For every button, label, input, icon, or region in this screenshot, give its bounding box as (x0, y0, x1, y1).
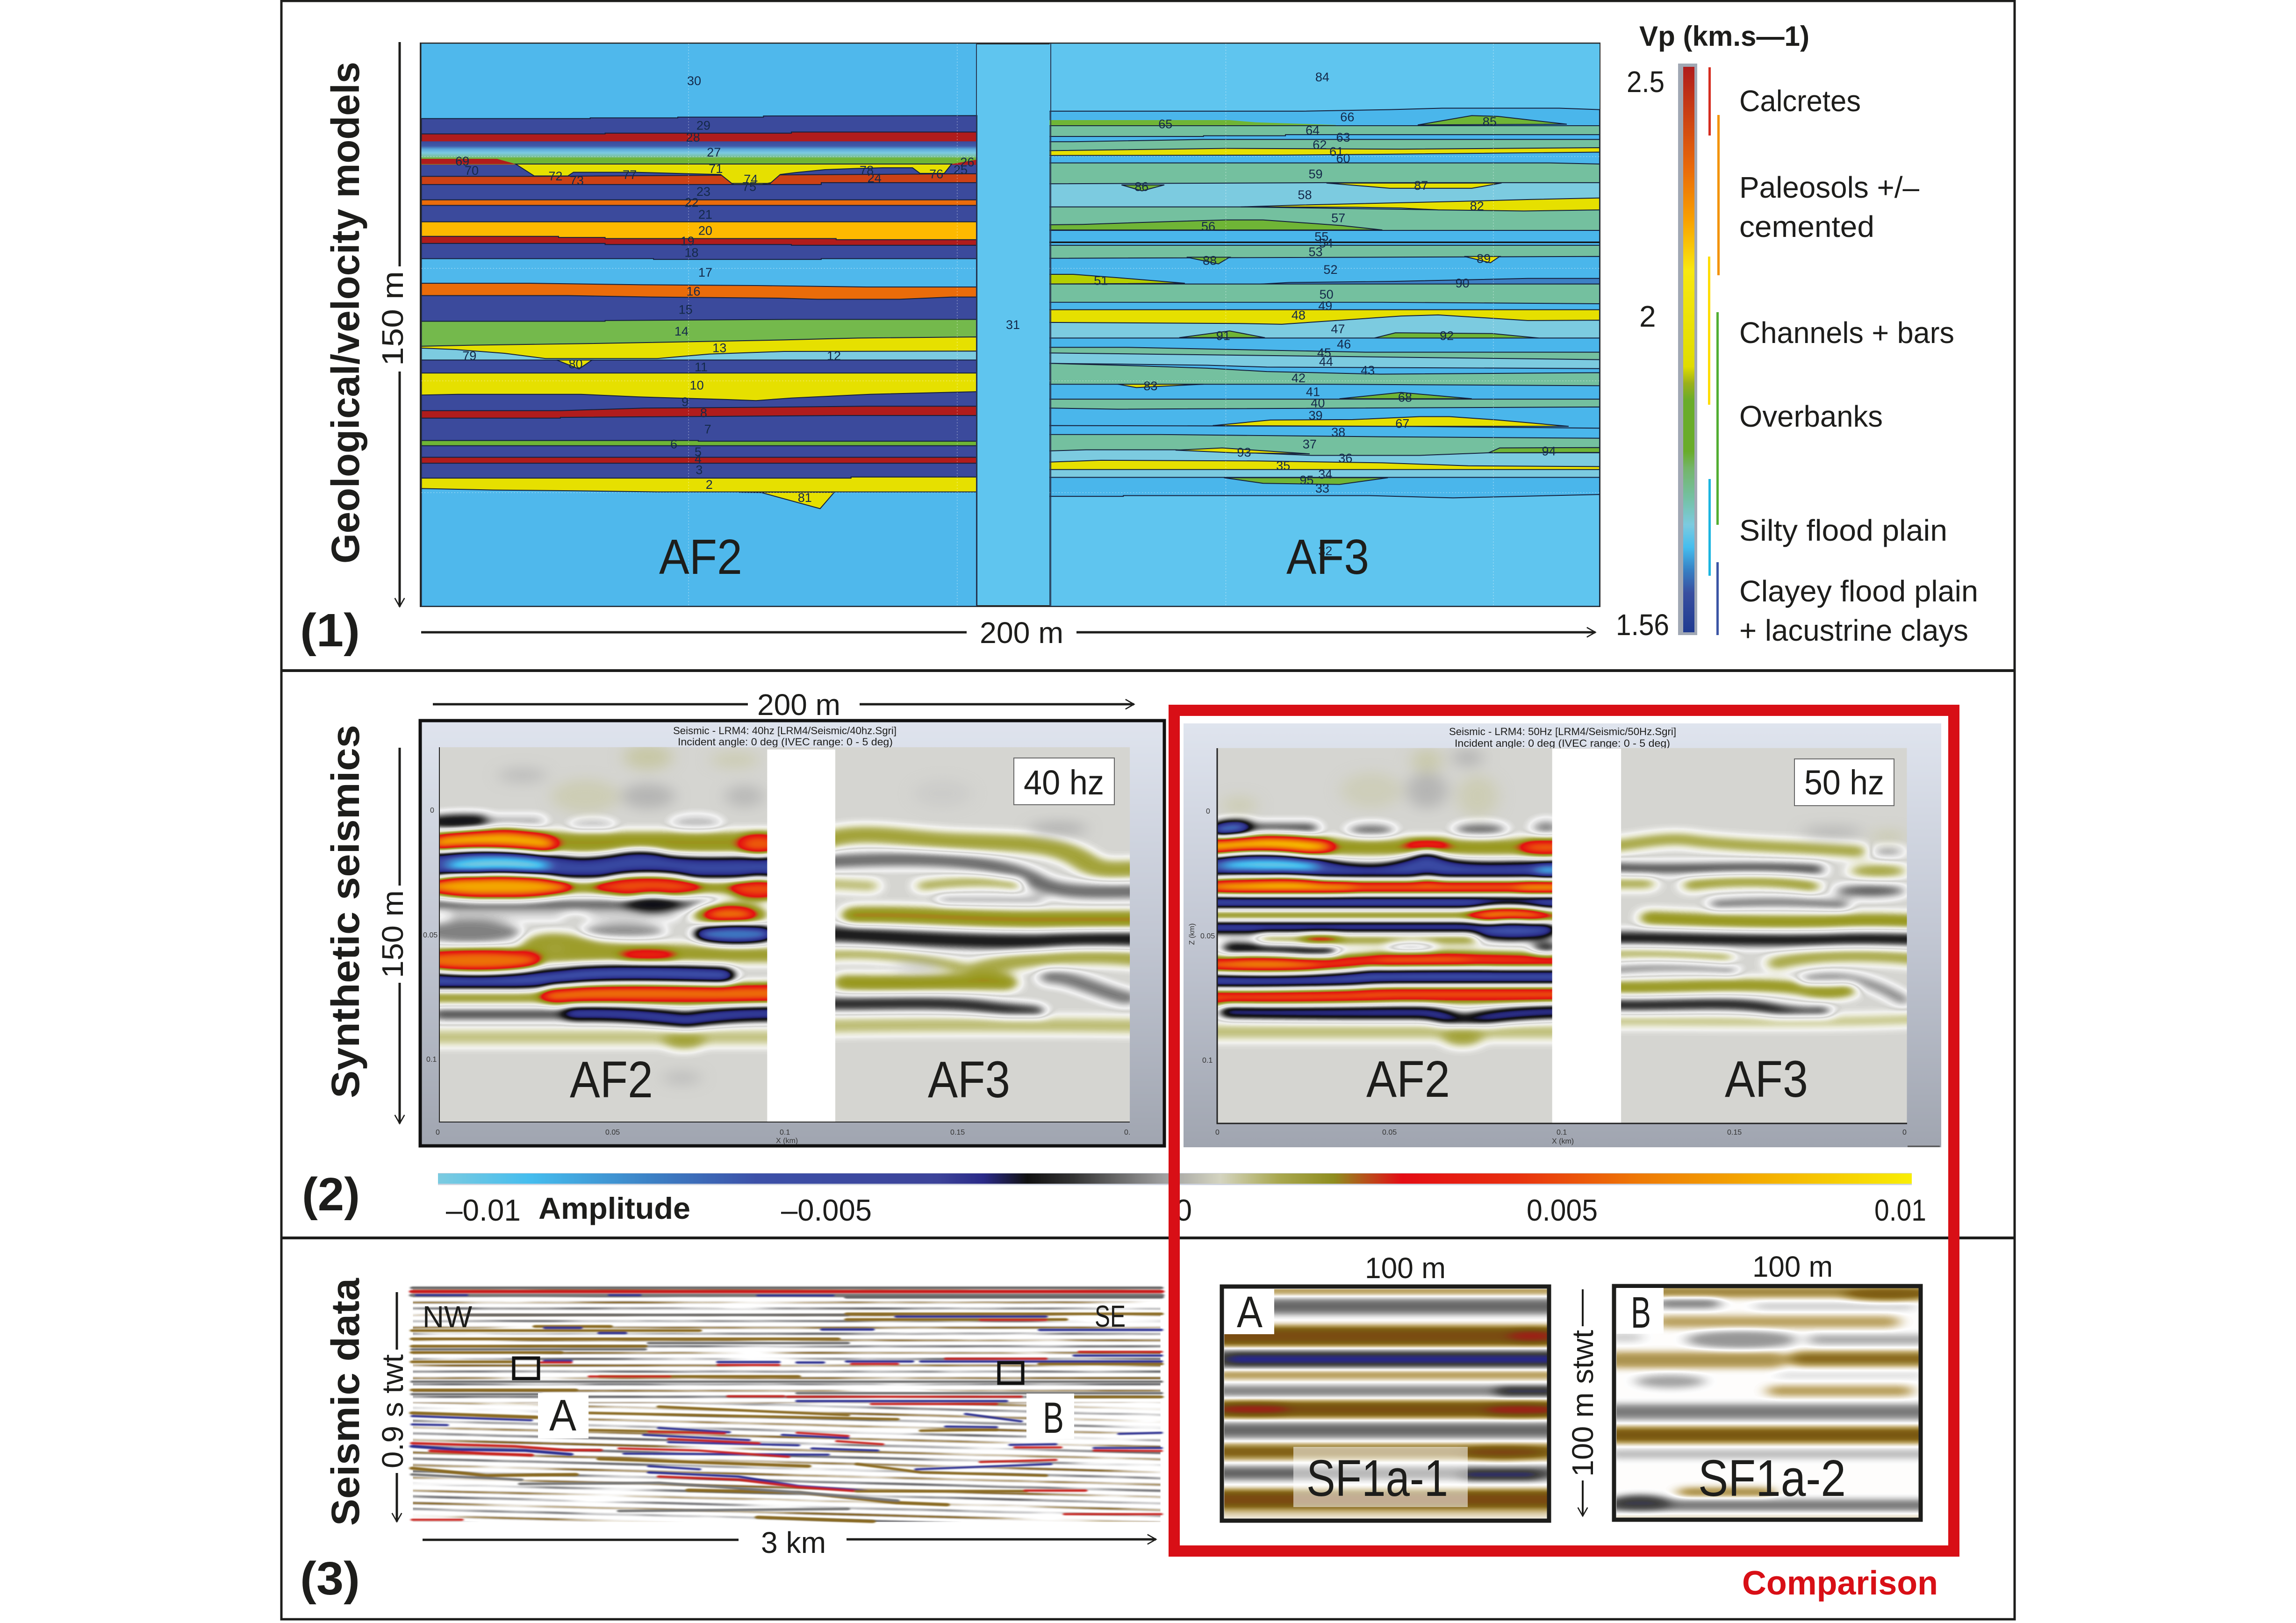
layer numbers AF3: 67 (1395, 416, 1409, 430)
tag A: A (1237, 1287, 1263, 1337)
facies labels (1739, 84, 1978, 647)
axes: 0.05 (1382, 1129, 1397, 1137)
layer numbers AF2: 16 (686, 284, 700, 298)
label AF2: AF2 (659, 529, 742, 585)
amplitude tick labels: 0.01 (1874, 1193, 1926, 1227)
layer numbers AF3: 57 (1331, 210, 1345, 225)
layer numbers AF2: 12 (827, 348, 841, 363)
label AF3: AF3 (928, 1051, 1010, 1108)
amplitude tick labels: –0.005 (781, 1193, 872, 1227)
40 hz label (1014, 758, 1114, 805)
legend title: Vp (km.s—1) (1639, 21, 1809, 52)
layer numbers AF2: 8 (700, 405, 707, 420)
layer numbers AF3: 52 (1323, 262, 1338, 277)
axes: 0. (1124, 1129, 1130, 1137)
axes: 0.1 (1557, 1129, 1567, 1137)
section title: Incident angle: 0 deg (IVEC range: 0 - 5 deg) (1455, 737, 1670, 749)
comparison crop B (1169, 1243, 2030, 1577)
axes: 0.05 (1200, 932, 1215, 940)
layer numbers AF3: 62 (1313, 137, 1327, 152)
layer numbers AF2: 28 (686, 130, 700, 144)
vertical scale 0.9 s twt: 0.9 s twt (376, 1354, 409, 1468)
horizontal scale 200 m: 200 m (980, 616, 1063, 650)
velocity ticks: 2.5 (1627, 65, 1665, 99)
panel 1: geological/velocity models (300, 21, 1978, 657)
amplitude colour bar (438, 1173, 1926, 1227)
layer numbers AF3: 89 (1477, 251, 1491, 265)
axes (1188, 748, 1940, 1146)
location box B (999, 1363, 1023, 1383)
horizontal scale 200 m: 200 m (757, 688, 840, 722)
layer numbers AF2: 73 (570, 173, 584, 188)
model frame background and central pillar (421, 43, 1600, 606)
axes: 0 (436, 1129, 440, 1137)
strong reflectors (413, 1288, 1161, 1522)
comparison crop A (1169, 1243, 2030, 1577)
tag SF1a-1: SF1a-1 (1306, 1450, 1448, 1507)
axes: 0.05 (423, 931, 438, 939)
width scale 100 m (B): 100 m (1752, 1251, 1833, 1283)
faint background tones (1222, 749, 1906, 842)
layer numbers AF3: 66 (1340, 109, 1354, 124)
layer numbers AF3: 55 (1314, 229, 1328, 243)
axes: X (km) (1552, 1137, 1574, 1145)
colour bar (1678, 64, 1697, 635)
layer numbers AF3: 34 (1318, 467, 1332, 481)
layer numbers AF3: 39 (1308, 408, 1323, 422)
tag SF1a-2: SF1a-2 (1698, 1450, 1846, 1507)
label SE: SE (1095, 1299, 1126, 1333)
layer numbers AF3: 37 (1303, 436, 1317, 451)
velocity model AF3 (1049, 44, 1600, 606)
layer numbers AF2: 2 (706, 477, 713, 492)
layer numbers AF3: 48 (1292, 307, 1306, 322)
layer numbers AF3: 56 (1201, 219, 1215, 234)
layer numbers AF2: 19 (681, 234, 695, 248)
panel 2: synthetic seismics (304, 694, 1941, 1225)
layer numbers AF2: 21 (698, 207, 712, 222)
label AF3: AF3 (1725, 1051, 1808, 1108)
horizontal scale 3 km: 3 km (761, 1526, 826, 1559)
layer numbers AF3: 86 (1134, 179, 1148, 193)
layer numbers AF3: 63 (1336, 130, 1350, 144)
gap between AF2 and AF3 (767, 750, 835, 1124)
layer numbers AF3: 50 (1320, 287, 1334, 301)
section title (673, 725, 897, 748)
location box A (514, 1358, 538, 1379)
panel 3: seismic data (300, 1243, 2030, 1605)
amplitude tick labels: 0.005 (1527, 1193, 1598, 1227)
facies labels: Overbanks (1739, 400, 1883, 433)
row divider 2 (280, 1237, 2016, 1239)
tag B: B (1631, 1288, 1651, 1337)
layer numbers AF3: 64 (1306, 123, 1320, 137)
layer numbers AF3: 61 (1329, 144, 1343, 159)
axes: 0.05 (605, 1129, 620, 1137)
vertical scale 100 m stwt: 100 m stwt (1566, 1330, 1600, 1477)
velocity colour legend (1616, 21, 1978, 647)
layer numbers AF2: 78 (860, 163, 874, 177)
layer numbers AF3: 91 (1216, 328, 1230, 343)
heading: geological/velocity models: Geological/velocity models (323, 62, 367, 564)
layer numbers AF3: 32 (1318, 543, 1332, 558)
layer numbers AF2: 10 (690, 378, 704, 392)
layer numbers AF2: 30 (687, 73, 701, 88)
panel number 2: (2) (302, 1168, 360, 1221)
heading: synthetic seismics: Synthetic seismics (323, 725, 367, 1098)
facies labels: Silty flood plain (1739, 514, 1947, 547)
layer numbers AF3: 85 (1483, 114, 1497, 129)
axes: 0 (1902, 1129, 1907, 1137)
layer numbers AF2: 81 (798, 490, 812, 505)
layer numbers AF2: 25 (954, 163, 968, 177)
section title (1449, 726, 1676, 749)
layer numbers AF2: 75 (742, 179, 756, 193)
layer numbers AF2: 3 (696, 462, 703, 477)
facies labels: Channels + bars (1739, 316, 1954, 350)
layer numbers AF3: 53 (1308, 244, 1323, 259)
outer frame (281, 1, 2015, 1619)
layer numbers AF3: 47 (1331, 322, 1345, 336)
layer numbers AF2: 76 (929, 166, 943, 181)
layer numbers AF3: 82 (1470, 199, 1484, 213)
heading: seismic data: Seismic data (323, 1278, 367, 1526)
axes: 0.15 (950, 1129, 965, 1137)
50 hz label: 50 hz (1804, 763, 1884, 802)
layer numbers AF3: 44 (1319, 354, 1333, 369)
layer numbers AF2: 80 (568, 357, 583, 371)
layer numbers AF2: 72 (548, 169, 563, 183)
layer numbers AF3: 58 (1298, 187, 1312, 202)
layer numbers AF3: 65 (1158, 117, 1172, 131)
axes: 0 (1215, 1129, 1220, 1137)
facies labels: cemented (1739, 210, 1874, 243)
vertical scale 150 m: 150 m (376, 271, 409, 366)
layer numbers AF3: 94 (1542, 443, 1556, 458)
width scale 100 m (A): 100 m (1365, 1252, 1446, 1285)
comparison frame (1174, 710, 1954, 1551)
layer numbers AF2: 22 (684, 195, 698, 210)
layer numbers AF2: 5 (695, 444, 702, 459)
axes: 0.1 (1202, 1057, 1213, 1065)
amplitude tick labels: –0.01 (446, 1193, 521, 1227)
velocity model AF2 (422, 44, 977, 606)
layer numbers AF3: 40 (1311, 396, 1325, 410)
layer numbers AF2: 79 (462, 348, 476, 363)
label NW: NW (423, 1300, 473, 1334)
layer numbers AF2: 17 (698, 265, 712, 279)
layer numbers AF2: 77 (623, 167, 637, 182)
facies labels: Clayey flood plain (1739, 574, 1978, 608)
amplitude tick labels (446, 1191, 1926, 1227)
layer numbers AF2: 14 (674, 324, 689, 338)
label AF2: AF2 (1366, 1051, 1450, 1108)
synthetic section 40 hz (363, 687, 1280, 1191)
axes: X (km) (776, 1137, 798, 1145)
axes (423, 747, 1130, 1145)
layer numbers AF3: 41 (1306, 385, 1320, 399)
seismic section (413, 1287, 1161, 1522)
layer numbers AF3: 45 (1317, 345, 1331, 360)
layer numbers AF2 (455, 73, 974, 505)
layer numbers AF3: 36 (1338, 451, 1352, 465)
gap between AF2 and AF3 (1552, 749, 1621, 1123)
tag B (1616, 1288, 1664, 1337)
axes: 0 (430, 807, 434, 815)
layer numbers AF2: 24 (868, 171, 882, 185)
layer numbers AF3: 54 (1319, 236, 1333, 250)
layer numbers AF2: 26 (960, 155, 974, 169)
layer numbers AF2: 29 (696, 118, 710, 133)
label B (1026, 1393, 1074, 1442)
layer numbers AF2: 74 (744, 172, 758, 186)
facies range bars (1708, 67, 1720, 635)
layer numbers AF2: 27 (707, 145, 721, 159)
layer numbers AF3: 51 (1094, 273, 1108, 287)
velocity ticks: 2 (1639, 300, 1656, 333)
amplitude field 50 hz (1118, 671, 2081, 1208)
facies labels: Calcretes (1739, 84, 1861, 118)
layer numbers AF2: 69 (455, 154, 469, 168)
layer numbers AF3: 87 (1414, 178, 1428, 193)
velocity ticks (1616, 65, 1669, 642)
label A (538, 1391, 588, 1440)
layer numbers AF2: 4 (695, 451, 702, 466)
layer numbers AF2: 71 (709, 161, 723, 176)
layer numbers AF3: 49 (1318, 299, 1332, 313)
layer numbers AF3: 33 (1315, 481, 1329, 495)
layer numbers AF2: 23 (696, 184, 710, 199)
layer numbers AF2: 15 (679, 302, 693, 317)
section title: Seismic - LRM4: 50Hz [LRM4/Seismic/50Hz.Sgri] (1449, 726, 1676, 737)
layer numbers AF2: 13 (712, 341, 726, 355)
comparison label: Comparison (1742, 1565, 1938, 1602)
facies labels: + lacustrine clays (1739, 614, 1968, 647)
facies labels: Paleosols +/– (1739, 171, 1919, 204)
label AF2: AF2 (570, 1051, 653, 1108)
layer numbers AF3: 59 (1308, 166, 1323, 181)
velocity ticks: 1.56 (1616, 608, 1669, 642)
layer numbers AF2: 70 (465, 163, 479, 178)
faint background tones (498, 744, 1087, 1085)
layer numbers AF3: 60 (1336, 151, 1350, 165)
layer numbers AF3: 90 (1456, 276, 1470, 290)
layer numbers AF2: 7 (704, 422, 711, 436)
layer numbers AF3: 84 (1315, 70, 1329, 84)
axes: 0.15 (1727, 1129, 1742, 1137)
label AF3: AF3 (1286, 529, 1369, 585)
axes: 0 (1206, 808, 1210, 815)
layer numbers AF3: 43 (1361, 363, 1375, 377)
layer numbers AF3: 46 (1337, 337, 1351, 351)
tag A (1224, 1287, 1274, 1337)
layer numbers AF2: 20 (698, 223, 712, 238)
layer numbers AF2: 11 (695, 359, 708, 374)
section title: Seismic - LRM4: 40hz [LRM4/Seismic/40hz.Sgri] (673, 725, 897, 736)
layer numbers AF2: 9 (682, 394, 689, 409)
layer numbers AF3: 42 (1292, 371, 1306, 385)
synthetic section 50 hz (1118, 671, 2081, 1208)
layer numbers AF3: 83 (1143, 379, 1157, 393)
section title: Incident angle: 0 deg (IVEC range: 0 - 5 deg) (678, 736, 893, 748)
label B: B (1043, 1393, 1064, 1442)
AF3 (1599, 839, 1858, 851)
panel number 3: (3) (300, 1552, 360, 1605)
amplitude tick labels: Amplitude (538, 1191, 690, 1225)
amplitude tick labels: 0 (1175, 1193, 1192, 1227)
amplitude field 40 hz (363, 687, 1280, 1191)
layer numbers AF2: 18 (684, 245, 698, 260)
model divider lines (976, 43, 1051, 606)
vertical scale 150 m: 150 m (376, 890, 409, 978)
layer numbers AF3: 68 (1398, 390, 1412, 405)
label 31: 31 (1006, 318, 1020, 332)
axes: 0.1 (780, 1129, 790, 1137)
layer numbers AF3: 35 (1276, 458, 1290, 473)
layer numbers AF2: 6 (670, 436, 677, 451)
layer numbers AF3: 95 (1299, 473, 1314, 487)
axes: Z (km) (1188, 923, 1196, 945)
layer numbers AF3: 88 (1203, 253, 1217, 267)
layer numbers AF3: 38 (1331, 425, 1345, 439)
panel number 1: (1) (300, 604, 360, 657)
axes: 0.1 (426, 1056, 437, 1064)
AF3 (817, 835, 1136, 870)
layer numbers AF3 (1094, 70, 1556, 558)
layer numbers AF3: 92 (1440, 328, 1454, 343)
40 hz label: 40 hz (1024, 763, 1104, 802)
label A: A (549, 1391, 577, 1440)
row divider 1 (280, 669, 2016, 672)
layer numbers AF3: 93 (1237, 445, 1251, 459)
